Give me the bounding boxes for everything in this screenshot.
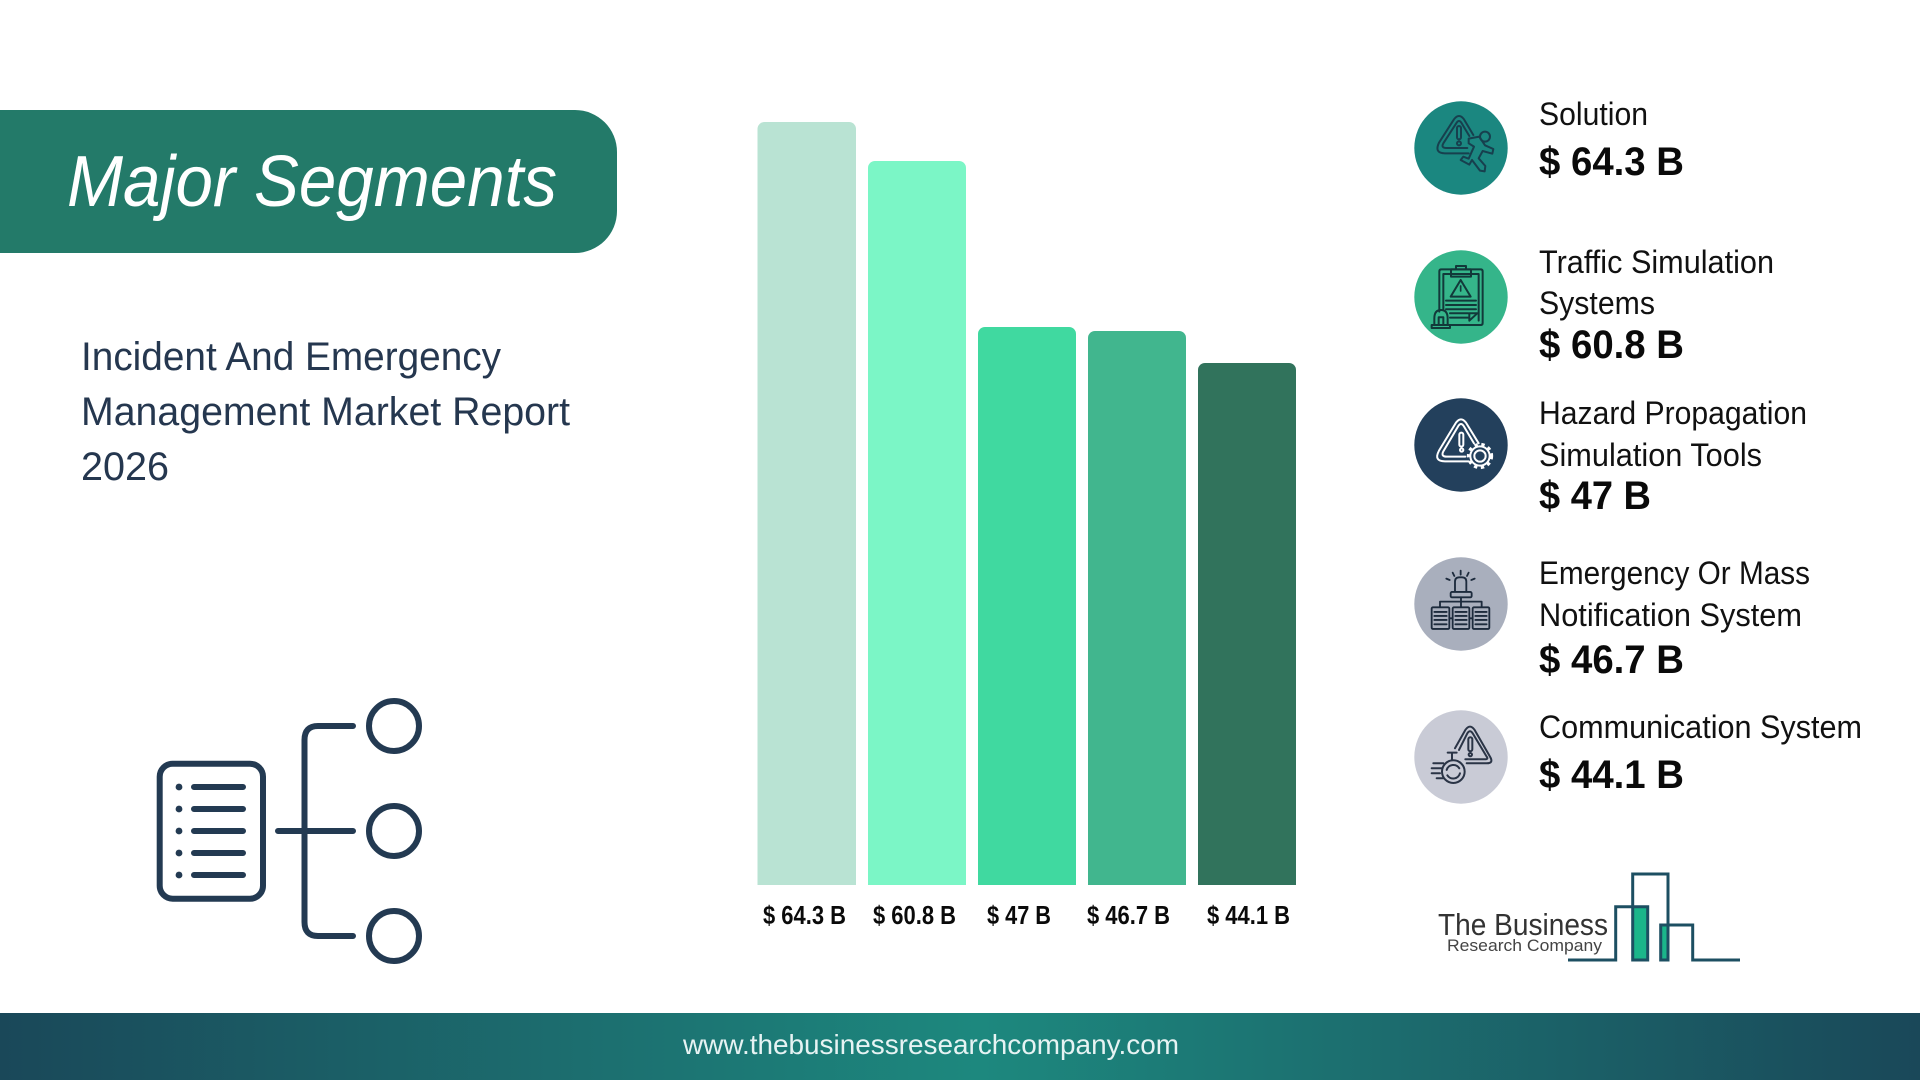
bar value labels: $ 60.8 B: [873, 900, 956, 930]
label: Notification System: [1539, 597, 1802, 633]
label: [1539, 395, 1807, 473]
bar value labels: $ 46.7 B: [1087, 900, 1170, 930]
value: $ 47 B: [1539, 474, 1651, 518]
segment: Hazard Propagation Simulation Tools: [1414, 395, 1807, 518]
value: $ 46.7 B: [1539, 638, 1684, 682]
value: $ 60.8 B: [1539, 323, 1684, 367]
segment: Communication System: [1414, 709, 1862, 804]
segment: Emergency Or Mass Notification System: [1414, 555, 1810, 682]
footer website url: www.thebusinessresearchcompany.com: [682, 1029, 1179, 1060]
logo: The Business Research Company: The Business: [1438, 907, 1608, 942]
label: Communication System: [1539, 709, 1862, 745]
label: Hazard Propagation: [1539, 395, 1807, 431]
bar value labels: $ 64.3 B: [763, 900, 846, 930]
value: $ 44.1 B: [1539, 753, 1684, 797]
segment: Traffic Simulation Systems: [1414, 244, 1774, 367]
bar value labels: [763, 900, 1290, 930]
subtitle text block: [81, 335, 570, 489]
label: [1539, 555, 1810, 633]
label: Simulation Tools: [1539, 437, 1762, 473]
bar: Emergency Or Mass Notification System: [1088, 331, 1186, 885]
bar chart: [758, 122, 1296, 930]
icon: siren with server stacks: [1414, 557, 1508, 651]
bar: Traffic Simulation Systems: [868, 161, 966, 885]
label: Traffic Simulation: [1539, 244, 1774, 280]
subtitle text block: 2026: [81, 445, 169, 489]
logo: The Business Research Company: [1438, 874, 1740, 960]
icon: warning triangle with running person: [1414, 101, 1508, 195]
title: Major Segments: [67, 142, 557, 222]
value: $ 64.3 B: [1539, 140, 1684, 184]
bar: Communication System: [1198, 363, 1296, 885]
logo: The Business Research Company: Research Company: [1447, 936, 1603, 955]
label: Emergency Or Mass: [1539, 555, 1810, 591]
label: [1539, 244, 1774, 321]
header banner: [0, 110, 617, 253]
bar value labels: $ 44.1 B: [1207, 900, 1290, 930]
icon: list with branches: [160, 701, 419, 961]
icon: warning triangle with gear: [1414, 398, 1508, 492]
icon: warning triangle with stopwatch: [1414, 710, 1508, 804]
label: Systems: [1539, 285, 1655, 321]
segment: Solution: [1414, 96, 1684, 195]
footer bar: [0, 1013, 1920, 1080]
panel: segment list: [1414, 96, 1862, 804]
subtitle text block: Management Market Report: [81, 390, 570, 434]
bar: Solution: [758, 122, 856, 885]
label: Solution: [1539, 96, 1648, 132]
subtitle text block: Incident And Emergency: [81, 335, 501, 379]
bar value labels: $ 47 B: [987, 900, 1051, 930]
icon: clipboard with warning and beacon: [1414, 250, 1508, 344]
bar: Hazard Propagation Simulation Tools: [978, 327, 1076, 885]
